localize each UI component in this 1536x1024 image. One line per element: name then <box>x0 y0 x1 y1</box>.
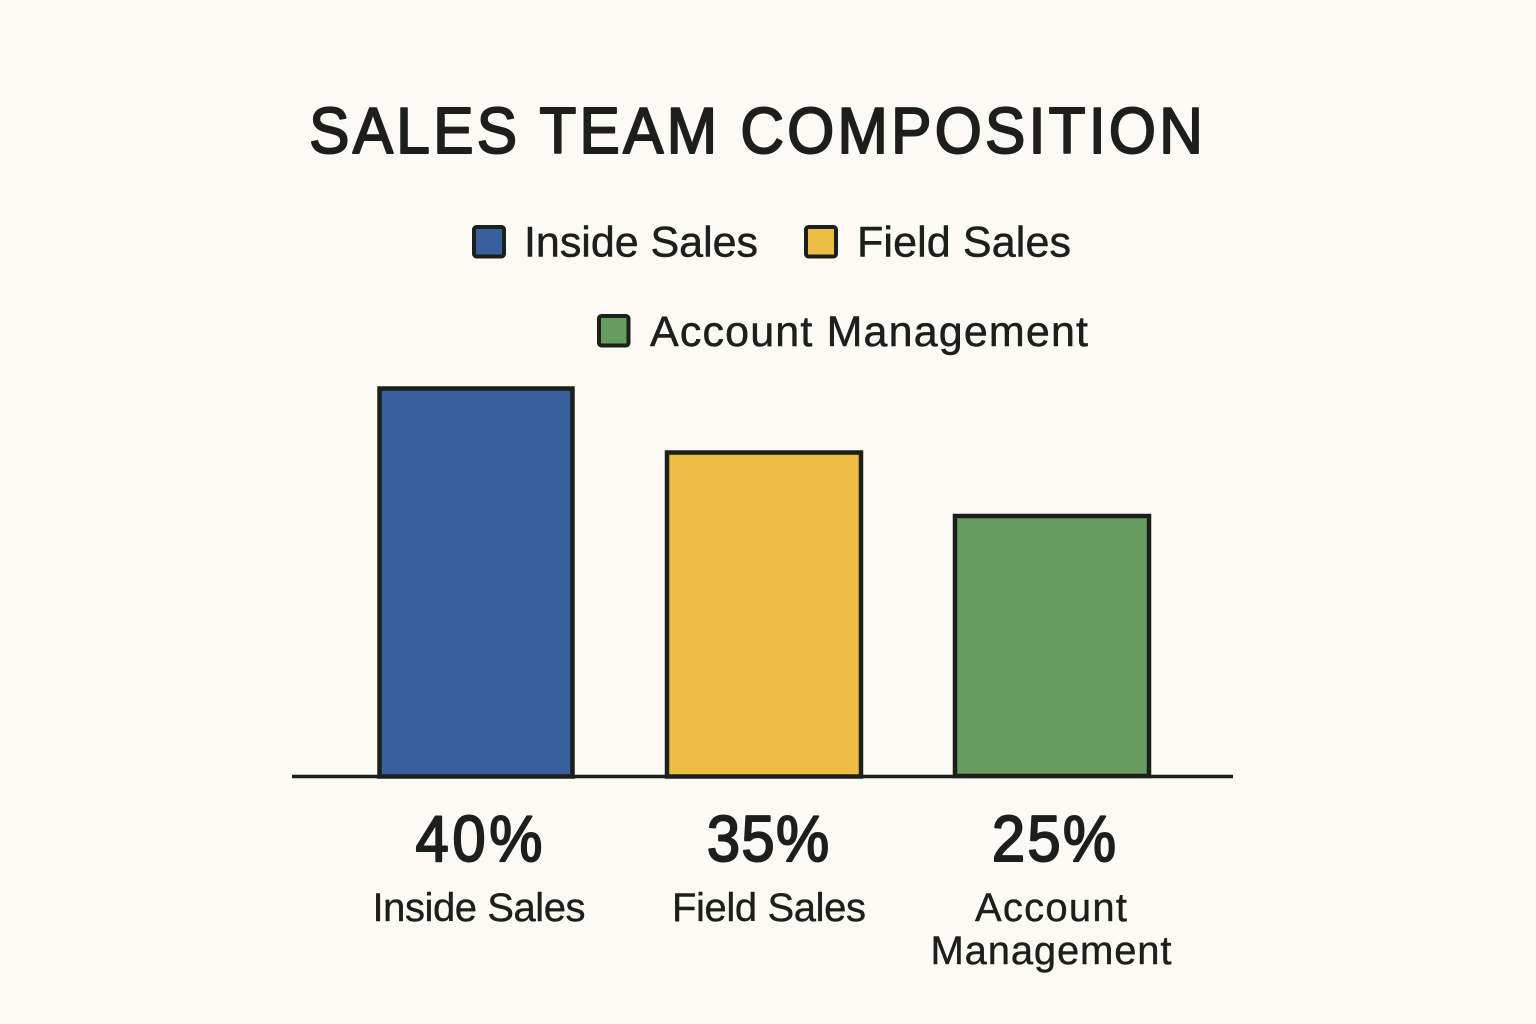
legend: field sales: Field Sales <box>857 218 1071 266</box>
bar: inside sales 40% <box>380 388 572 776</box>
label: account management: Management <box>930 929 1172 973</box>
label: inside sales <box>372 803 586 930</box>
label: account management: Account <box>975 886 1127 930</box>
label: field sales: 35% <box>707 803 829 876</box>
axis line <box>292 775 1233 778</box>
label: field sales: Field Sales <box>672 886 866 930</box>
legend: account management: Account Management <box>650 308 1088 356</box>
title: SALES TEAM COMPOSITION <box>309 95 1203 167</box>
label: inside sales: Inside Sales <box>372 886 586 930</box>
label: account management: 25% <box>992 803 1116 876</box>
label: inside sales: 40% <box>416 803 542 876</box>
legend <box>474 218 1088 356</box>
legend: inside sales: Inside Sales <box>524 218 758 266</box>
label: account management <box>930 803 1172 973</box>
label: field sales <box>672 803 866 930</box>
bar: field sales 35% <box>667 452 861 776</box>
bar: account management 25% <box>955 516 1149 776</box>
bar chart <box>292 388 1233 776</box>
